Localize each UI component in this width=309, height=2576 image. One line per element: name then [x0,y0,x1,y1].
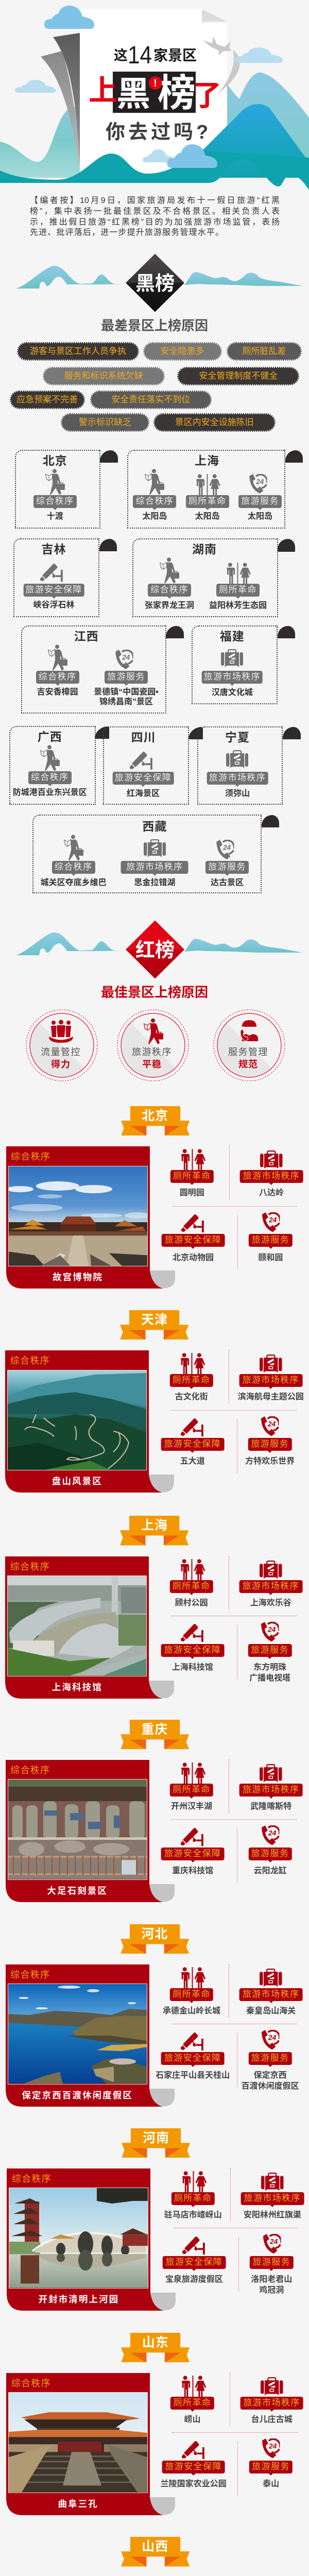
item: 旅游服务 泰山 [237,2438,304,2495]
item: 旅游市场秩序 安阳林州红旗渠 [239,2171,306,2227]
item: 综合秩序 太阳岛: 太阳岛 [142,512,167,521]
item: 综合秩序 防城港百业东兴景区: 防城港百业东兴景区 [13,788,87,797]
card: 上海科技馆: 综合秩序 [10,1562,50,1572]
item: 旅游安全保障 北京动物园: 北京动物园 [173,1253,214,1262]
item: 旅游市场秩序 八达岭: 八达岭 [259,1189,284,1197]
clouds [15,6,283,168]
title line 2: 上黑榜了 [89,72,221,114]
item: 综合秩序 城关区夺底乡维巴: 城关区夺底乡维巴 [41,878,107,887]
item: 旅游服务 方特欢乐世界: 旅游服务 [251,1439,289,1449]
ribbon: 天津 [120,1310,189,1340]
item: 厕所革命 圆明园: 圆明园 [180,1189,204,1197]
province: 吉林: 吉林 [41,543,66,556]
item: 旅游市场秩序 汉唐文化城: 汉唐文化城 [212,688,253,697]
item: 厕所革命 太阳岛: 太阳岛 [195,512,220,521]
card: 保定京西百渡休闲度假区: 保定京西百渡休闲度假区 [22,2090,133,2100]
item: 旅游服务 太阳岛: 旅游服务 [241,496,279,506]
item: 综合秩序 太阳岛: 综合秩序 [136,496,174,506]
black list badge: 黑榜 [135,273,175,295]
item: 旅游服务 云阳龙缸: 云阳龙缸 [254,1867,287,1875]
item: 厕所革命 益阳林芳生态园: 厕所革命 [219,585,257,595]
title line 1: 这 [114,48,128,63]
item: 旅游安全保障 上海科技馆: 旅游安全保障 [164,1645,221,1655]
reason tags [10,342,302,432]
title line 3: 你去过吗? [106,122,211,143]
card: 开封市清明上河园: 开封市清明上河园 [38,2294,119,2304]
paper fold [202,9,227,22]
item: 厕所革命 太阳岛: 厕所革命 [188,496,226,506]
item: 旅游市场秩序 秦皇岛山海关: 旅游市场秩序 [243,1989,299,1999]
item: 旅游服务 东方明珠广播电视塔: 东方明珠 [253,1663,286,1672]
item: 厕所革命 顾村公园 [158,1558,225,1615]
item: 厕所革命 承德金山岭长城: 承德金山岭长城 [163,2007,220,2015]
card: 曲阜三孔 [6,2373,175,2515]
item: 旅游市场秩序 汉唐文化城 [202,649,263,697]
item: 厕所革命 古文化街: 厕所革命 [173,1375,210,1385]
card: 保定京西百渡休闲度假区 [6,1964,175,2107]
section: 重庆 [6,1720,307,1902]
card: 盘山风景区 [5,1350,174,1493]
item: 旅游服务 保定京西百渡休闲度假区: 旅游服务 [251,2053,289,2063]
province: 北京: 北京 [43,454,67,467]
photo: 清明上河园 [9,2188,148,2288]
item: 旅游市场秩序 台儿庄古城 [238,2375,305,2432]
item: 旅游市场秩序 八达岭 [240,1150,303,1197]
card: 开封市清明上河园 [7,2168,176,2311]
item: 旅游服务 景德镇 [94,650,159,706]
item: 旅游市场秩序 滨海航母主题公园: 滨海航母主题公园 [238,1393,304,1401]
item: 旅游市场秩序 八达岭: 旅游市场秩序 [243,1171,300,1181]
item: 厕所革命 崂山: 崂山 [184,2415,200,2424]
card: 故宫博物院: 故宫博物院 [53,1272,103,1282]
item: 旅游服务 东方明珠广播电视塔: 旅游服务 [251,1645,289,1655]
province: 上海 [127,450,303,529]
circle: 旅游秩序平稳: 旅游秩序 [132,1047,172,1057]
item: 旅游服务 方特欢乐世界 [236,1416,303,1472]
item: 旅游安全保障 五大道 [159,1416,226,1472]
circle: 服务管理规范: 规范 [238,1059,258,1070]
section: 上海 [5,1516,306,1699]
province: 福建: 福建 [220,630,245,643]
title line 2: 上黑榜了: 黑 [116,75,150,113]
item: 旅游安全保障 石家庄平山县天桂山: 旅游安全保障 [164,2053,221,2063]
item: 旅游服务 达古景区 [205,840,249,887]
province: 湖南: 湖南 [192,543,217,556]
section: 山东 [6,2333,307,2516]
item: 综合秩序 吉安香樟园: 综合秩序 [39,672,76,682]
item: 旅游服务 太阳岛: 太阳岛 [248,512,272,521]
photo: 河北湖景 [8,1984,147,2084]
province: 江西 [21,625,184,714]
item: 旅游安全保障 北京动物园 [160,1212,227,1268]
photo: 故宫 [8,1166,148,1266]
title line 1: 家景区 [153,47,197,63]
item: 厕所革命 驻马店市嵖岈山: 厕所革命 [174,2193,212,2203]
province: 湖南 [132,538,295,617]
item: 旅游安全保障 北京动物园: 旅游安全保障 [165,1235,221,1245]
item: 旅游安全保障 重庆科技馆: 重庆科技馆 [172,1867,213,1875]
reason tags: 厕所脏乱差 [242,346,286,356]
item: 综合秩序 城关区夺底乡维巴: 综合秩序 [55,862,92,872]
mountain: middle blue [201,104,309,178]
card: 开封市清明上河园: 综合秩序 [12,2174,52,2184]
item: 旅游市场秩序 须弥山 [207,750,268,798]
black list badge [16,253,302,312]
circle: 流量管控得力 [26,1009,98,1081]
item: 旅游服务 保定京西百渡休闲度假区: 保定京西 [254,2071,287,2080]
reason tags: 安全隐患多 [161,346,204,356]
item: 旅游服务 颐和园 [237,1212,304,1268]
item: 厕所革命 驻马店市嵖岈山 [160,2171,227,2227]
ribbon: 重庆 [121,1720,189,1749]
item: 旅游安全保障 宝泉旅游度假区: 宝泉旅游度假区 [165,2275,223,2284]
item: 旅游安全保障 宝泉旅游度假区 [161,2234,228,2291]
item: 旅游安全保障 上海科技馆: 上海科技馆 [172,1663,213,1672]
item: 旅游市场秩序 武隆喀斯特: 武隆喀斯特 [250,1802,291,1811]
item: 厕所革命 顾村公园: 顾村公园 [175,1599,208,1607]
page: dark curl [53,33,80,167]
item: 厕所革命 开州汉丰湖: 开州汉丰湖 [171,1802,212,1811]
item: 旅游市场秩序 武隆喀斯特: 旅游市场秩序 [243,1785,299,1794]
province: 北京 [15,450,118,529]
province: 四川 [103,726,203,805]
item: 旅游市场秩序 须弥山: 旅游市场秩序 [209,773,266,783]
province: 宁夏: 宁夏 [225,731,250,744]
item: 旅游市场秩序 思金拉错湖: 思金拉错湖 [134,878,175,887]
card: 上海科技馆: 上海科技馆 [52,1682,102,1692]
item: 旅游市场秩序 上海欢乐谷: 上海欢乐谷 [250,1599,291,1607]
item: 综合秩序 太阳岛 [133,469,176,521]
item: 旅游服务 云阳龙缸: 旅游服务 [251,1849,289,1858]
item: 厕所革命 太阳岛 [186,474,229,521]
item: 旅游市场秩序 上海欢乐谷 [237,1558,304,1615]
card: 大足石刻景区: 大足石刻景区 [47,1886,108,1896]
province: 福建 [192,625,295,704]
item: 综合秩序 吉安香樟园: 吉安香樟园 [37,688,78,697]
red list badge [16,920,302,979]
item: 旅游服务 洛阳老君山鸡冠洞: 洛阳老君山 [251,2275,292,2284]
item: 旅游市场秩序 上海欢乐谷: 旅游市场秩序 [243,1581,299,1591]
province: 四川: 四川 [131,731,156,744]
item: 厕所革命 顾村公园: 厕所革命 [173,1581,210,1591]
ribbon: 河南 [122,2128,191,2158]
reason tags: 服务和标识系统欠缺 [64,371,143,381]
photo: 上海科技馆 [8,1576,146,1676]
item: 厕所革命 驻马店市嵖岈山: 驻马店市嵖岈山 [164,2211,222,2219]
province: 吉林 [13,538,117,617]
item: 旅游安全保障 兰陵国家农业公园: 旅游安全保障 [165,2462,222,2471]
title line 1 [114,42,197,69]
reason tags: 游客与景区工作人员争执 [30,346,126,356]
ribbon: 山西: 山西 [142,2539,168,2554]
ribbon: 山东: 山东 [142,2335,169,2350]
item: 旅游服务 洛阳老君山鸡冠洞: 旅游服务 [252,2257,290,2267]
item: 旅游安全保障 红海景区 [112,752,174,798]
card: 曲阜三孔: 曲阜三孔 [58,2499,98,2509]
province: 宁夏 [197,726,301,805]
paper sheet [80,9,227,178]
item: 旅游市场秩序 安阳林州红旗渠: 旅游市场秩序 [244,2193,301,2203]
province: 广西: 广西 [38,730,62,743]
editor's note: 先进、批评落后，进一步提升旅游服务管理水平。 [30,228,224,237]
item: 旅游安全保障 五大道: 五大道 [180,1457,205,1466]
ribbon: 上海: 上海 [141,1518,168,1533]
province: 西藏: 西藏 [142,820,167,833]
item: 旅游市场秩序 秦皇岛山海关 [237,1967,304,2023]
title line 2: 上黑榜了: 了 [193,79,221,112]
item: 综合秩序 防城港百业东兴景区 [13,745,87,797]
editor's note: 榜”，集中表扬一批最佳景区及不合格景区。相关负责人表 [30,207,280,216]
item: 旅游安全保障 红海景区: 红海景区 [127,789,160,798]
title line 2: 上黑榜了: 上 [89,74,117,107]
item: 旅游服务 方特欢乐世界: 方特欢乐世界 [245,1457,295,1466]
heading: red list reasons: 最佳景区上榜原因 [101,985,208,1000]
mountain: front teal band [0,150,309,190]
item: 旅游市场秩序 汉唐文化城: 旅游市场秩序 [204,672,261,682]
item: 旅游市场秩序 思金拉错湖: 旅游市场秩序 [126,862,183,872]
item: 旅游服务 泰山: 旅游服务 [252,2462,290,2471]
title line 2: 上黑榜了: ! [153,78,157,89]
item: 厕所革命 崂山: 厕所革命 [174,2398,211,2408]
item: 旅游市场秩序 台儿庄古城: 台儿庄古城 [251,2415,293,2424]
item: 旅游市场秩序 安阳林州红旗渠: 安阳林州红旗渠 [244,2211,301,2219]
photo: 盘山 [8,1370,146,1470]
item: 旅游市场秩序 武隆喀斯特 [237,1762,304,1819]
item: 旅游安全保障 峡谷浮石林: 旅游安全保障 [25,585,82,595]
item: 旅游市场秩序 台儿庄古城: 旅游市场秩序 [243,2398,300,2408]
section: 河南 [7,2128,308,2311]
item: 旅游安全保障 重庆科技馆 [159,1825,226,1882]
reason tags: 警示标识缺乏 [79,417,131,427]
section: 北京 [6,1106,303,1289]
item: 旅游市场秩序 滨海航母主题公园 [237,1352,304,1409]
item: 旅游安全保障 石家庄平山县天桂山 [159,2030,226,2087]
reason tags: 安全管理制度不健全 [199,371,278,381]
item: 综合秩序 十渡: 综合秩序 [36,496,74,506]
ribbon: 上海 [120,1516,189,1546]
title line 2: 上黑榜了: 榜 [158,72,196,114]
province: 西藏 [32,815,279,893]
item: 厕所革命 承德金山岭长城 [158,1967,225,2023]
item: 厕所革命 承德金山岭长城: 厕所革命 [173,1989,211,1999]
item: 旅游服务 景德镇: 景德镇“中国瓷园• [94,688,159,697]
item: 综合秩序 张家界龙王洞: 综合秩序 [150,585,188,595]
item: 综合秩序 张家界龙王洞 [145,557,194,610]
title line 1: 14 [128,42,152,69]
circle: 流量管控得力: 流量管控 [41,1047,81,1057]
item: 旅游安全保障 石家庄平山县天桂山: 石家庄平山县天桂山 [156,2071,230,2080]
circle: 旅游秩序平稳: 平稳 [142,1059,162,1070]
item: 综合秩序 防城港百业东兴景区: 综合秩序 [31,772,69,782]
circle: 服务管理规范: 服务管理 [228,1047,268,1057]
photo: 曲阜大成殿 [9,2393,147,2493]
item: 旅游安全保障 五大道: 旅游安全保障 [164,1439,221,1449]
circle: 服务管理规范 [213,1009,285,1081]
item: 旅游服务 泰山: 泰山 [263,2480,279,2488]
item: 综合秩序 十渡: 十渡 [47,512,63,521]
item: 旅游安全保障 上海科技馆 [159,1622,226,1679]
card: 大足石刻景区: 综合秩序 [10,1765,50,1775]
circle: 旅游秩序平稳 [117,1009,189,1081]
mountain: left [0,106,80,178]
card: 盘山风景区: 盘山风景区 [52,1476,102,1486]
item: 厕所革命 古文化街 [158,1352,225,1409]
item: 旅游安全保障 重庆科技馆: 旅游安全保障 [164,1849,221,1858]
editor's note: 示，推出假日旅游“红黑榜”目的为加强旅游市场监管，表扬 [30,218,280,227]
item: 厕所革命 益阳林芳生态园 [209,563,267,610]
editor's note: 【编者按】10月9日，国家旅游局发布十一假日旅游“红黑 [30,196,280,205]
photo: 大足石刻 [8,1780,147,1879]
circle: 流量管控得力: 得力 [51,1059,71,1070]
item: 厕所革命 益阳林芳生态园: 益阳林芳生态园 [209,601,267,610]
page: light curl [41,51,80,170]
heading: black list reasons: 最差景区上榜原因 [101,318,208,333]
item: 旅游服务 颐和园: 旅游服务 [252,1235,289,1245]
section: 天津 [5,1310,306,1493]
item: 旅游安全保障 峡谷浮石林 [24,564,84,609]
card: 故宫博物院 [6,1146,175,1289]
card: 大足石刻景区 [6,1760,175,1902]
item: 旅游服务 洛阳老君山鸡冠洞 [238,2234,305,2291]
item: 综合秩序 张家界龙王洞: 张家界龙王洞 [145,601,194,610]
reason tags: 景区内安全设施陈旧 [175,417,254,427]
ribbon: 重庆: 重庆 [141,1722,168,1736]
item: 旅游服务 达古景区: 旅游服务 [208,862,246,872]
item: 旅游市场秩序 秦皇岛山海关: 秦皇岛山海关 [246,2007,296,2015]
item: 旅游市场秩序 须弥山: 须弥山 [225,789,250,798]
item: 旅游市场秩序 思金拉错湖 [121,839,188,887]
section: 河北 [6,1924,307,2107]
section: 山西 [6,2537,307,2576]
ribbon: 天津: 天津 [141,1313,168,1327]
ribbon: 河北: 河北 [141,1927,168,1941]
item: 综合秩序 吉安香樟园 [36,645,79,697]
item: 旅游服务 颐和园: 颐和园 [258,1253,283,1262]
item: 旅游服务 洛阳老君山鸡冠洞: 鸡冠洞 [259,2286,284,2295]
editor's note [30,196,280,237]
item: 厕所革命 崂山 [159,2375,226,2432]
reason tags: 应急预案不完善 [16,395,78,404]
item: 旅游服务 太阳岛 [238,474,282,521]
province: 江西: 锦绣昌南”景区 [99,698,153,706]
item: 旅游服务 东方明珠广播电视塔 [236,1622,303,1679]
card: 盘山风景区: 综合秩序 [10,1355,50,1366]
item: 厕所革命 开州汉丰湖 [158,1762,225,1819]
item: 旅游安全保障 红海景区: 旅游安全保障 [115,773,171,783]
item: 旅游服务 保定京西百渡休闲度假区 [237,2030,304,2087]
item: 厕所革命 开州汉丰湖: 厕所革命 [173,1785,211,1794]
hero illustration with title [0,6,309,190]
ribbon: 北京: 北京 [142,1109,168,1123]
item: 综合秩序 十渡 [33,469,77,521]
item: 旅游安全保障 兰陵国家农业公园 [160,2438,227,2495]
item: 旅游安全保障 峡谷浮石林: 峡谷浮石林 [33,601,75,609]
province: 广西 [9,726,109,805]
item: 旅游服务 云阳龙缸 [237,1825,304,1882]
item: 厕所革命 圆明园 [170,1149,214,1197]
card: 故宫博物院: 综合秩序 [11,1151,50,1162]
plane and trail [203,36,240,94]
item: 旅游服务 保定京西百渡休闲度假区: 百渡休闲度假区 [242,2082,299,2091]
card: 曲阜三孔: 综合秩序 [11,2378,51,2388]
item: 综合秩序 城关区夺底乡维巴 [41,835,107,887]
ribbon: 山东 [121,2333,190,2362]
card: 上海科技馆 [5,1556,174,1699]
item: 厕所革命 古文化街: 古文化街 [175,1393,208,1401]
item: 旅游安全保障 宝泉旅游度假区: 旅游安全保障 [166,2257,222,2267]
item: 旅游安全保障 兰陵国家农业公园: 兰陵国家农业公园 [161,2480,227,2488]
reason tags: 安全责任落实不到位 [111,395,190,404]
ribbon: 北京 [121,1106,190,1136]
item: 厕所革命 圆明园: 厕所革命 [173,1171,211,1181]
province: 江西: 江西 [74,630,99,643]
ribbon: 山西 [121,2537,190,2567]
card: 保定京西百渡休闲度假区: 综合秩序 [10,1970,50,1980]
province: 上海: 上海 [195,454,219,467]
red list badge: 红榜 [135,940,175,961]
mountain: right back [221,73,309,170]
item: 旅游市场秩序 滨海航母主题公园: 旅游市场秩序 [243,1375,299,1385]
item: 旅游服务 东方明珠广播电视塔: 广播电视塔 [249,1674,290,1683]
ribbon: 河南: 河南 [143,2131,169,2145]
item: 旅游服务 达古景区: 达古景区 [211,878,244,887]
ribbon: 河北 [121,1924,189,1954]
item: 旅游服务 景德镇: 旅游服务 [107,672,145,682]
